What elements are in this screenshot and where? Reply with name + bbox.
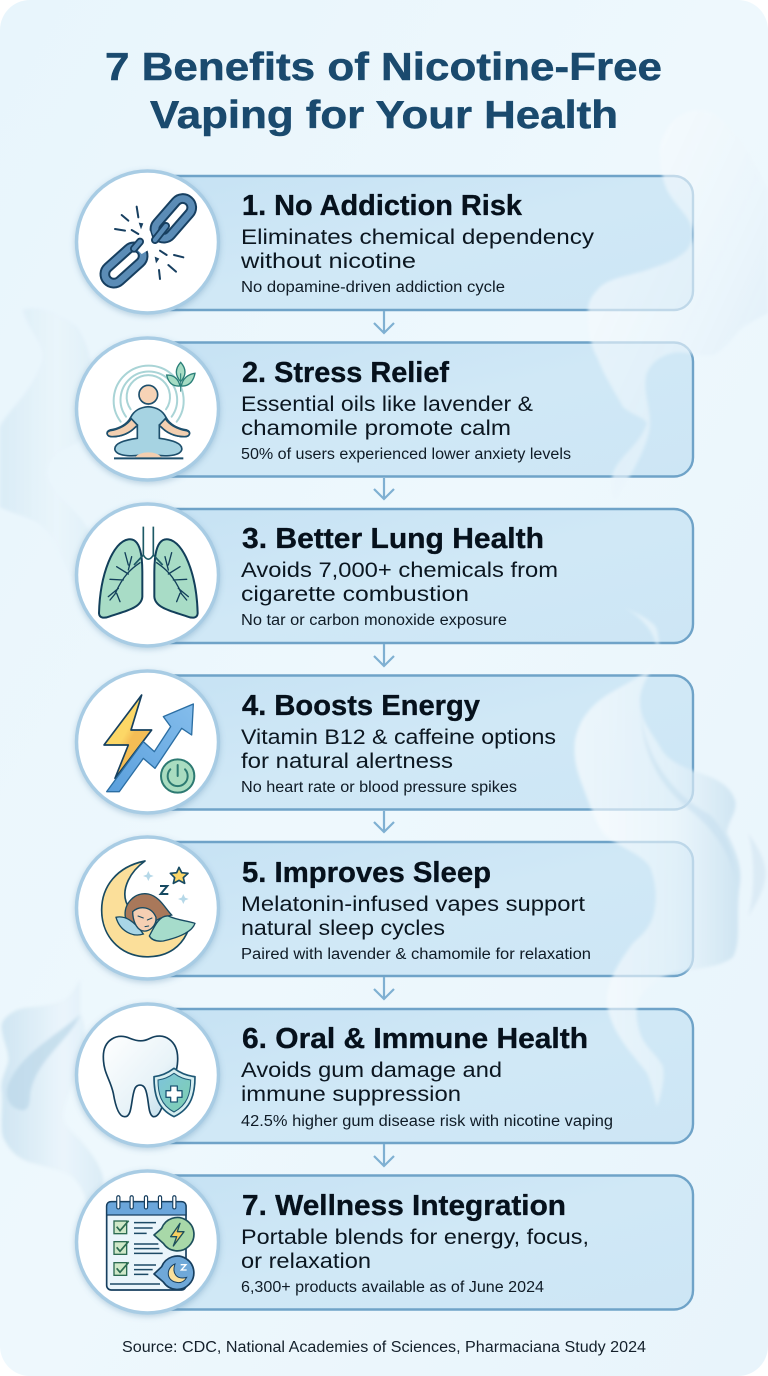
title: [105, 46, 662, 137]
icon: wellness calendar: [107, 1197, 194, 1290]
text: benefit 4: 4. Boosts Energy: [242, 690, 480, 722]
text: benefit 2: Essential oils like lavender &: [241, 392, 533, 416]
icon: tooth with shield: [103, 1036, 195, 1117]
circle badge 6: [76, 1004, 218, 1146]
text: benefit 3: No tar or carbon monoxide exposure: [241, 612, 507, 629]
text: benefit 1: [240, 190, 594, 296]
text: benefit 2: [241, 357, 571, 463]
card 1 panel: [150, 176, 693, 310]
text: benefit 5: 5. Improves Sleep: [242, 857, 491, 889]
text: benefit 3: 3. Better Lung Health: [242, 523, 544, 555]
text: benefit 3: [241, 523, 558, 629]
text: benefit 7: 7. Wellness Integration: [242, 1190, 566, 1222]
card 6 panel: [150, 1009, 693, 1143]
source note: Source: CDC, National Academies of Sciences, Pharmaciana Study 2024: [122, 1339, 646, 1356]
card 5 panel: [150, 842, 693, 976]
circle badge 7: [76, 1171, 218, 1313]
text: benefit 1: No dopamine-driven addiction cycle: [241, 279, 505, 296]
text: benefit 4: No heart rate or blood pressure spikes: [241, 779, 517, 796]
circle badge 5: [76, 837, 218, 979]
text: benefit 1: 1. No Addiction Risk: [242, 190, 523, 222]
circle badge 3: [76, 504, 218, 646]
text: benefit 6: 6. Oral & Immune Health: [242, 1023, 588, 1055]
text: benefit 4: [241, 690, 556, 796]
arrow 5 to 6: [374, 977, 394, 999]
arrow 4 to 5: [374, 811, 394, 832]
icon: meditating person: [107, 362, 195, 458]
text: benefit 5: natural sleep cycles: [241, 916, 445, 940]
circle badge 2: [76, 338, 218, 480]
arrow 3 to 4: [374, 644, 394, 666]
text: benefit 6: [241, 1023, 613, 1130]
text: benefit 4: for natural alertness: [241, 749, 453, 773]
arrow 2 to 3: [374, 478, 394, 499]
icon: lightning bolt and arrow: [104, 695, 194, 793]
circle badge 4: [76, 671, 218, 813]
icon: broken chain: [101, 195, 195, 287]
text: benefit 7: 6,300+ products available as of June 2024: [241, 1279, 544, 1296]
text: benefit 6: Avoids gum damage and: [241, 1058, 502, 1082]
text: benefit 5: Melatonin-infused vapes support: [241, 892, 585, 916]
text: benefit 2: 50% of users experienced lower anxiety levels: [241, 446, 571, 463]
arrow 6 to 7: [374, 1144, 394, 1166]
text: benefit 3: cigarette combustion: [241, 582, 469, 606]
card 3 panel: [150, 509, 693, 643]
card 7 panel: [150, 1176, 693, 1310]
smoke wisps: right side: [574, 110, 768, 1107]
text: benefit 4: Vitamin B12 & caffeine options: [241, 725, 556, 749]
circle badge 1: [76, 171, 218, 313]
text: benefit 2: chamomile promote calm: [241, 416, 511, 440]
arrow 1 to 2: [374, 311, 394, 333]
text: benefit 1: Eliminates chemical dependency: [241, 225, 594, 249]
text: benefit 5: [241, 857, 591, 963]
icon: sleeping girl on moon: [102, 861, 195, 957]
card 4 panel: [150, 676, 693, 810]
title: Vaping for Your Health: [150, 94, 618, 137]
text: benefit 1: without nicotine: [240, 249, 416, 273]
text: benefit 3: Avoids 7,000+ chemicals from: [241, 558, 558, 582]
text: benefit 2: 2. Stress Relief: [242, 357, 449, 389]
card 2 panel: [150, 342, 693, 476]
text: benefit 7: or relaxation: [241, 1249, 371, 1273]
text: benefit 7: Portable blends for energy, focus,: [241, 1225, 589, 1249]
text: benefit 5: Paired with lavender & chamomile for relaxation: [241, 946, 591, 963]
smoke wisps: left side: [0, 309, 103, 1203]
text: benefit 7: [241, 1190, 589, 1296]
text: benefit 6: 42.5% higher gum disease risk with nicotine vaping: [241, 1113, 613, 1130]
icon: lungs: [99, 527, 198, 618]
text: benefit 6: immune suppression: [241, 1082, 461, 1106]
title: 7 Benefits of Nicotine-Free: [105, 46, 662, 89]
